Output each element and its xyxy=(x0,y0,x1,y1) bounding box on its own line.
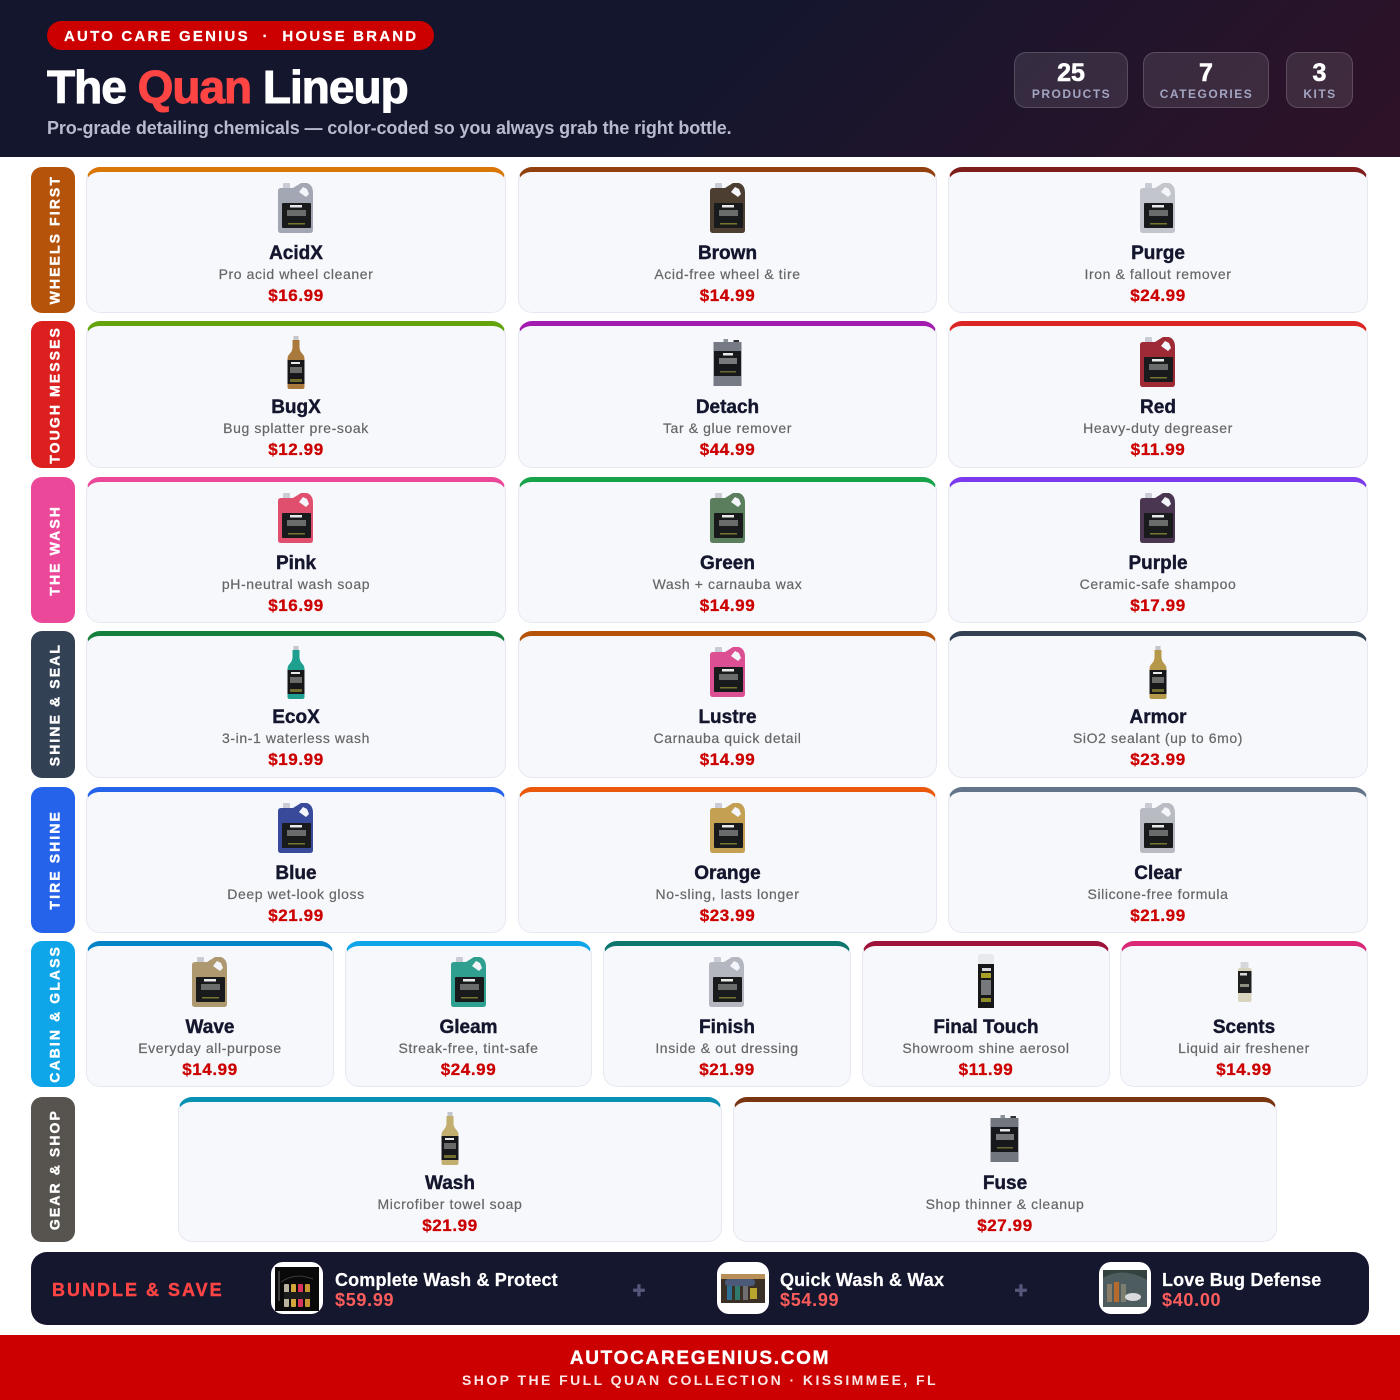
icon: magenta jug xyxy=(710,647,745,697)
card: Blue xyxy=(86,787,506,933)
description: Iron & fallout remover xyxy=(1084,266,1232,282)
icon: pink jug xyxy=(278,493,313,543)
description: Acid-free wheel & tire xyxy=(654,266,801,282)
description: Heavy-duty degreaser xyxy=(1083,420,1233,436)
bundle heading: BUNDLE & SAVE xyxy=(52,1280,224,1300)
icon: gray jug xyxy=(278,183,313,233)
icon: silver jug xyxy=(1140,803,1175,853)
icon: small bottle xyxy=(1238,962,1252,1002)
brand pill: AUTO CARE GENIUS · HOUSE BRAND xyxy=(64,28,418,45)
kit thumbnail: complete wash and protect xyxy=(271,1262,323,1314)
category tab: shine and seal xyxy=(31,631,75,778)
stat: categories: CATEGORIES xyxy=(1160,87,1253,101)
icon: silver jug xyxy=(709,957,744,1007)
card: Wash xyxy=(178,1097,722,1242)
product name: BugX xyxy=(271,397,321,418)
price: $14.99 xyxy=(700,750,755,769)
title: The Quan Lineup xyxy=(47,61,408,113)
card: Lustre xyxy=(518,631,937,778)
price: $24.99 xyxy=(441,1060,496,1079)
product name: EcoX xyxy=(272,707,320,728)
stat: kits: 3 xyxy=(1313,59,1326,87)
price: $27.99 xyxy=(977,1216,1033,1235)
category tab: the wash xyxy=(31,477,75,623)
product name: Brown xyxy=(698,243,757,264)
website: AUTOCAREGENIUS.COM xyxy=(570,1348,830,1369)
product name: Detach xyxy=(696,397,759,418)
card: Fuse xyxy=(733,1097,1277,1242)
icon: blue jug xyxy=(278,803,313,853)
description: pH-neutral wash soap xyxy=(222,576,370,592)
icon: teal bottle xyxy=(288,646,304,699)
price: $23.99 xyxy=(1130,750,1186,769)
category tab: cabin and glass: CABIN & GLASS xyxy=(46,945,62,1083)
description: Deep wet-look gloss xyxy=(227,886,365,902)
plus sign: + xyxy=(1014,1278,1027,1303)
kit thumbnail: love bug defense xyxy=(1099,1262,1151,1314)
stat: categories: 7 xyxy=(1199,59,1213,87)
price: $21.99 xyxy=(1130,906,1186,925)
description: Liquid air freshener xyxy=(1178,1040,1310,1056)
product name: Armor xyxy=(1129,707,1186,728)
description: Wash + carnauba wax xyxy=(653,576,802,592)
description: Showroom shine aerosol xyxy=(902,1040,1070,1056)
description: Everyday all-purpose xyxy=(138,1040,282,1056)
product name: Orange xyxy=(694,863,761,884)
price: $14.99 xyxy=(700,286,755,305)
description: Ceramic-safe shampoo xyxy=(1080,576,1236,592)
stat: kits: KITS xyxy=(1303,87,1337,101)
description: Streak-free, tint-safe xyxy=(398,1040,539,1056)
card: Clear xyxy=(948,787,1368,933)
stat: products: 25 xyxy=(1057,59,1085,87)
card: Orange xyxy=(518,787,937,933)
kit name: complete wash and protect: Complete Wash & Protect xyxy=(335,1270,558,1290)
card: Brown xyxy=(518,167,937,313)
card: BugX xyxy=(86,321,506,468)
icon: tan jug xyxy=(710,803,745,853)
product name: Gleam xyxy=(439,1017,498,1038)
icon: light gray jug xyxy=(1140,183,1175,233)
price: $24.99 xyxy=(1130,286,1186,305)
card: Final Touch xyxy=(862,941,1110,1087)
category tab: shine and seal: SHINE & SEAL xyxy=(46,643,62,766)
product name: Scents xyxy=(1213,1017,1275,1038)
description: 3-in-1 waterless wash xyxy=(222,730,370,746)
card: Pink xyxy=(86,477,506,623)
product name: Purple xyxy=(1128,553,1188,574)
price: $16.99 xyxy=(268,286,324,305)
price: $14.99 xyxy=(1216,1060,1272,1079)
category tab: cabin and glass xyxy=(31,941,75,1087)
description: Bug splatter pre-soak xyxy=(223,420,369,436)
kit name: love bug defense: Love Bug Defense xyxy=(1162,1270,1321,1290)
description: SiO2 sealant (up to 6mo) xyxy=(1073,730,1243,746)
price: $17.99 xyxy=(1130,596,1186,615)
description: Shop thinner & cleanup xyxy=(926,1196,1084,1212)
kit thumbnail: quick wash and wax xyxy=(717,1262,769,1314)
description: No-sling, lasts longer xyxy=(656,886,799,902)
stat: products: PRODUCTS xyxy=(1032,87,1111,101)
card: Scents xyxy=(1120,941,1368,1087)
price: $16.99 xyxy=(268,596,324,615)
price: $21.99 xyxy=(699,1060,755,1079)
product name: Final Touch xyxy=(933,1017,1039,1038)
product name: Red xyxy=(1140,397,1176,418)
icon: aerosol can xyxy=(978,954,994,1008)
icon: khaki jug xyxy=(192,957,227,1007)
product name: Fuse xyxy=(983,1173,1027,1194)
description: Microfiber towel soap xyxy=(378,1196,522,1212)
bundle and save bar xyxy=(31,1252,1369,1325)
description: Tar & glue remover xyxy=(663,420,792,436)
subtitle: Pro-grade detailing chemicals — color-coded so you always grab the right bottle. xyxy=(47,118,732,138)
product name: AcidX xyxy=(269,243,323,264)
category tab: tough messes xyxy=(31,321,75,468)
price: $11.99 xyxy=(959,1060,1013,1079)
price: $23.99 xyxy=(700,906,755,925)
card: Wave xyxy=(86,941,334,1087)
card: Detach xyxy=(518,321,937,468)
icon: amber bottle xyxy=(288,336,304,389)
card: AcidX xyxy=(86,167,506,313)
stat: products xyxy=(1014,52,1128,108)
product name: Green xyxy=(700,553,755,574)
product name: Clear xyxy=(1134,863,1182,884)
card: Purple xyxy=(948,477,1368,623)
description: Pro acid wheel cleaner xyxy=(219,266,373,282)
product name: Blue xyxy=(275,863,317,884)
description: Silicone-free formula xyxy=(1088,886,1228,902)
header banner xyxy=(0,0,1400,157)
stat: categories xyxy=(1143,52,1269,108)
card: Armor xyxy=(948,631,1368,778)
card: Gleam xyxy=(345,941,592,1087)
icon: khaki bottle xyxy=(442,1112,458,1165)
kit price: $59.99 xyxy=(335,1290,394,1310)
product name: Pink xyxy=(276,553,316,574)
price: $11.99 xyxy=(1131,440,1185,459)
price: $21.99 xyxy=(268,906,324,925)
category tab: tire shine: TIRE SHINE xyxy=(46,810,62,910)
icon: metal can xyxy=(990,1115,1018,1162)
description: Carnauba quick detail xyxy=(653,730,802,746)
card: Green xyxy=(518,477,937,623)
price: $44.99 xyxy=(700,440,755,459)
category tab: wheels first xyxy=(31,167,75,313)
product name: Wave xyxy=(186,1017,234,1038)
footer xyxy=(0,1335,1400,1400)
footer tagline: SHOP THE FULL QUAN COLLECTION · KISSIMMEE, FL xyxy=(462,1372,938,1388)
icon: red jug xyxy=(1140,337,1175,387)
plus sign: + xyxy=(632,1278,645,1303)
icon: brown jug xyxy=(710,183,745,233)
price: $12.99 xyxy=(268,440,324,459)
category tab: gear and shop xyxy=(31,1097,75,1242)
category tab: wheels first: WHEELS FIRST xyxy=(46,175,62,305)
product name: Purge xyxy=(1131,243,1185,264)
category tab: tough messes: TOUGH MESSES xyxy=(46,326,62,463)
description: Inside & out dressing xyxy=(655,1040,799,1056)
product name: Lustre xyxy=(698,707,757,728)
icon: metal can xyxy=(714,339,742,386)
icon: purple jug xyxy=(1140,493,1175,543)
card: EcoX xyxy=(86,631,506,778)
product name: Finish xyxy=(699,1017,755,1038)
card: Purge xyxy=(948,167,1368,313)
category tab: tire shine xyxy=(31,787,75,933)
price: $14.99 xyxy=(182,1060,238,1079)
kit price: $40.00 xyxy=(1162,1290,1221,1310)
kit price: $54.99 xyxy=(780,1290,839,1310)
icon: green jug xyxy=(710,493,745,543)
stat: kits xyxy=(1286,52,1353,108)
price: $14.99 xyxy=(700,596,755,615)
icon: gold bottle xyxy=(1150,646,1166,699)
card: Red xyxy=(948,321,1368,468)
price: $21.99 xyxy=(422,1216,478,1235)
category tab: the wash: THE WASH xyxy=(46,505,62,595)
kit name: quick wash and wax: Quick Wash & Wax xyxy=(780,1270,944,1290)
product name: Wash xyxy=(425,1173,475,1194)
category tab: gear and shop: GEAR & SHOP xyxy=(46,1109,62,1230)
price: $19.99 xyxy=(268,750,324,769)
icon: teal jug xyxy=(451,957,486,1007)
brand pill xyxy=(47,21,434,50)
card: Finish xyxy=(603,941,851,1087)
